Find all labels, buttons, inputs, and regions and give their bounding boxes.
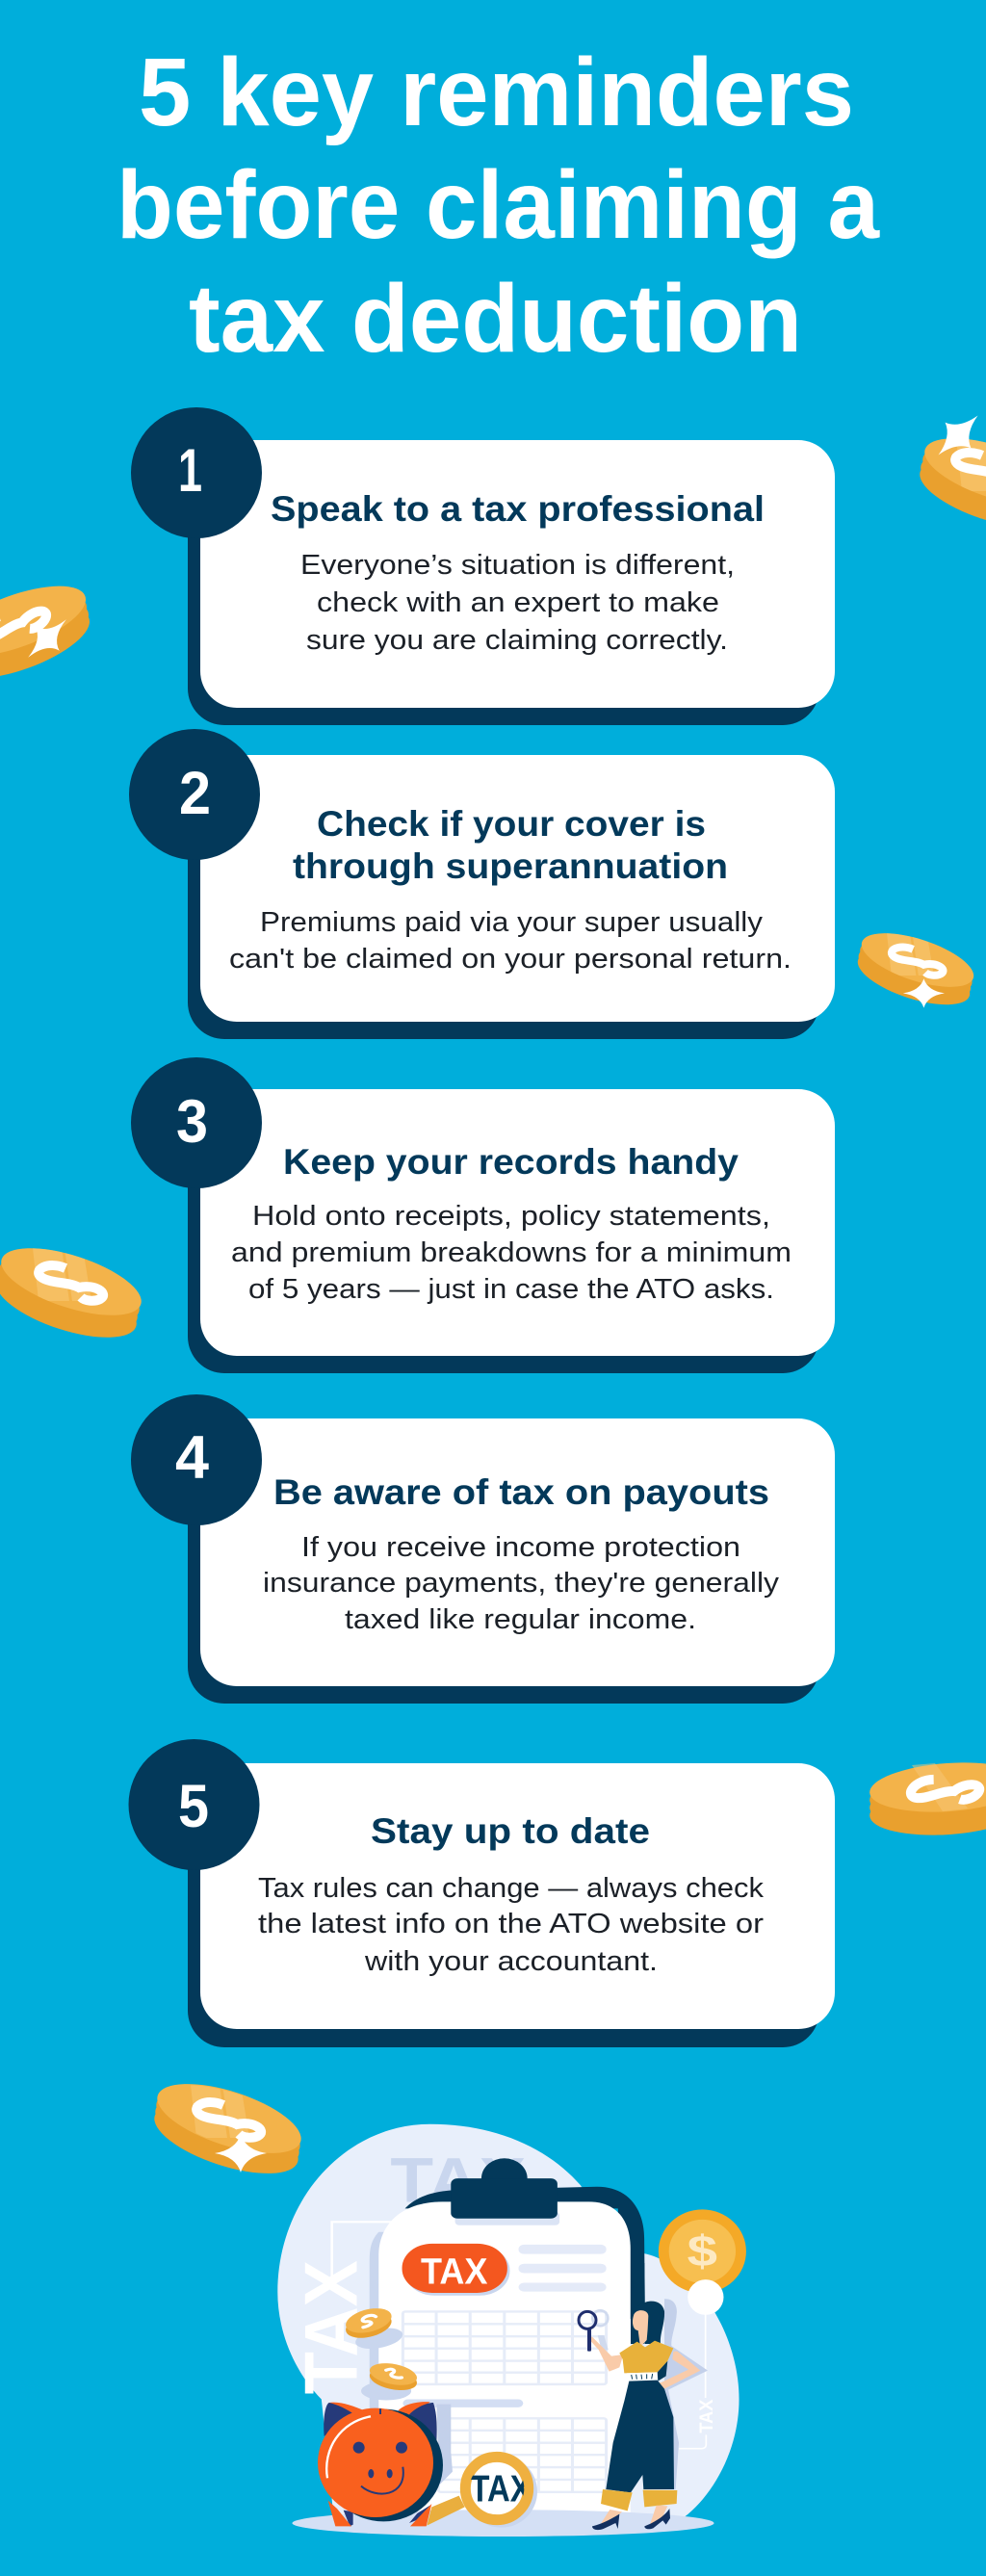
body 5: Tax rules can change — always check <box>258 1873 765 1904</box>
panel: reminder 5 <box>129 1739 835 2047</box>
heading 2: Check if your cover is <box>317 804 706 844</box>
body 3: of 5 years — just in case the ATO asks. <box>248 1274 774 1305</box>
faint frame <box>332 2222 393 2278</box>
table lower <box>438 2418 607 2492</box>
body 1 <box>300 550 735 656</box>
panel: reminder 1 <box>131 407 835 725</box>
number badge 3 <box>131 1057 262 1188</box>
body 4: If you receive income protection <box>301 1532 740 1563</box>
number badge 2 <box>129 729 260 860</box>
body 4: insurance payments, they're generally <box>263 1568 780 1599</box>
number badge 3: 3 <box>176 1088 208 1156</box>
ground ellipse <box>292 2510 714 2537</box>
gold dollar coin: $ <box>688 2226 717 2276</box>
body 1: sure you are claiming correctly. <box>306 625 728 656</box>
body 5: with your accountant. <box>364 1946 658 1977</box>
body 3 <box>231 1201 791 1305</box>
body 5 <box>258 1873 765 1977</box>
heading 2: through superannuation <box>293 846 728 886</box>
icon: coin right lower <box>868 1757 986 1840</box>
body 4: taxed like regular income. <box>345 1604 696 1635</box>
body 2: can't be claimed on your personal return. <box>229 944 791 975</box>
body 1: check with an expert to make <box>317 587 719 618</box>
clipboard paper shadow <box>370 2232 393 2419</box>
faint TAX lettering top: TAX <box>390 2144 527 2216</box>
body 3: and premium breakdowns for a minimum <box>231 1237 791 1268</box>
panel: reminder 4 <box>131 1394 835 1704</box>
heading 3: Keep your records handy <box>283 1142 739 1182</box>
title: before claiming a <box>117 151 880 259</box>
body 4 <box>263 1532 780 1635</box>
title <box>117 39 880 373</box>
white dot <box>688 2279 723 2315</box>
TAX badge <box>402 2244 509 2296</box>
panel: reminder 3 <box>131 1057 835 1373</box>
form lines <box>519 2245 607 2292</box>
body 5: the latest info on the ATO website or <box>258 1909 764 1939</box>
number badge 4 <box>131 1394 262 1525</box>
title: tax deduction <box>189 265 802 373</box>
number badge 1: 1 <box>178 437 202 505</box>
white rotated TAX lettering: TAX <box>289 2260 373 2394</box>
panel: reminder 2 <box>129 729 835 1039</box>
heading 4: Be aware of tax on payouts <box>273 1472 769 1512</box>
number badge 4: 4 <box>175 1424 209 1492</box>
title: 5 key reminders <box>139 39 854 146</box>
icon: coin right middle <box>857 933 974 1007</box>
body 2: Premiums paid via your super usually <box>260 907 764 938</box>
body 3: Hold onto receipts, policy statements, <box>252 1201 770 1232</box>
body 1: Everyone’s situation is different, <box>300 550 735 581</box>
background blob <box>277 2124 740 2520</box>
heading 2 <box>293 804 728 886</box>
clip shadow <box>455 2212 559 2225</box>
icon: coin top right <box>920 416 986 520</box>
figure: piggy bank and magnifier: TAX <box>470 2467 532 2510</box>
illustration: tax clipboard scene <box>277 2124 746 2537</box>
clip <box>451 2158 558 2219</box>
small coin upper <box>342 2303 405 2353</box>
icon: coin left upper <box>0 572 98 692</box>
long form line <box>402 2400 523 2407</box>
clipboard paper <box>378 2201 631 2521</box>
body 2 <box>229 907 791 975</box>
figure: woman with magnifier: TAX <box>697 2400 717 2433</box>
gold dollar coin <box>659 2209 746 2293</box>
figure: woman with magnifier <box>579 2263 717 2530</box>
heading 1: Speak to a tax professional <box>271 489 765 529</box>
figure: piggy bank and magnifier <box>318 2402 537 2528</box>
heading 5: Stay up to date <box>371 1811 650 1851</box>
clipboard back <box>405 2187 645 2319</box>
number badge 1 <box>131 407 262 538</box>
TAX badge: TAX <box>421 2251 488 2292</box>
number badge 5: 5 <box>178 1773 209 1840</box>
icon: coin left middle <box>0 1248 142 1338</box>
number badge 5 <box>129 1739 260 1870</box>
table upper <box>402 2311 607 2384</box>
icon: coin bottom left <box>154 2084 301 2173</box>
number badge 2: 2 <box>179 760 211 827</box>
small coin lower <box>361 2359 420 2401</box>
